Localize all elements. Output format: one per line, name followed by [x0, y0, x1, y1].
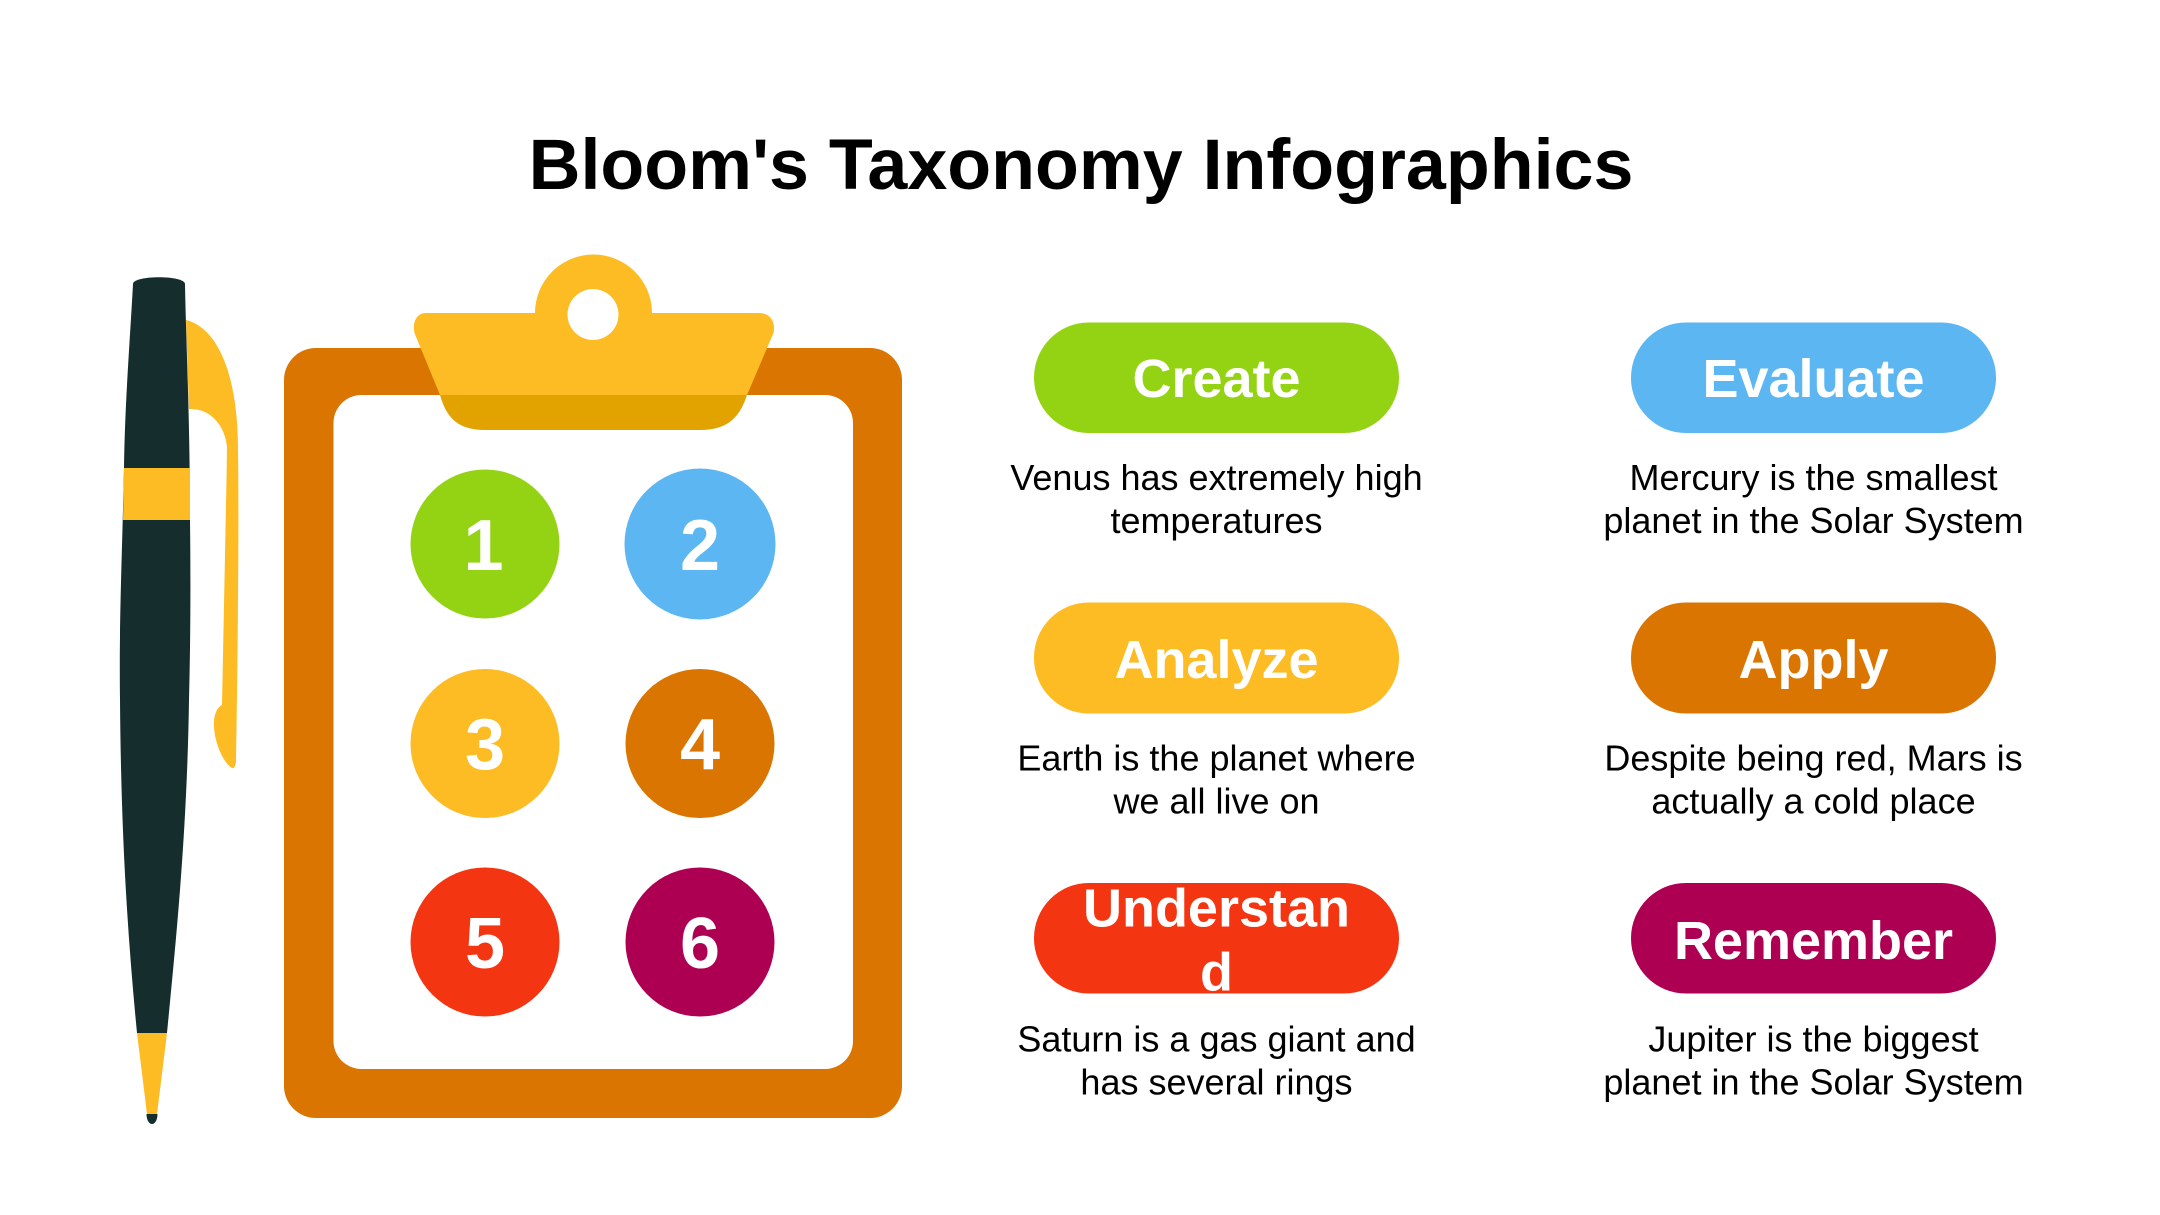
pen tip	[146, 1114, 158, 1124]
item: Understand: d	[1200, 942, 1233, 1002]
item: Remember	[1603, 883, 2024, 1102]
number 1	[410, 470, 560, 618]
item: Remember: Jupiter is the biggest	[1648, 1018, 1979, 1060]
item: Create: Create	[1132, 349, 1301, 409]
number 3	[410, 669, 560, 818]
number 4	[626, 669, 774, 818]
item: Create: Venus has extremely high	[1010, 457, 1423, 498]
pen band	[123, 468, 190, 520]
clipboard clip shadow	[440, 395, 747, 430]
item: Analyze: we all live on	[1112, 780, 1320, 822]
number 1: 1	[463, 506, 504, 586]
number 6: 6	[680, 904, 720, 984]
number 2	[624, 468, 776, 620]
number 6	[626, 868, 774, 1016]
clipboard board	[284, 348, 902, 1118]
item: Analyze: Earth is the planet where	[1017, 738, 1416, 778]
number 2: 2	[680, 506, 720, 586]
item: Remember: Remember	[1674, 911, 1953, 971]
item: Understand: has several rings	[1080, 1062, 1353, 1102]
item: Apply: Apply	[1738, 630, 1889, 690]
item: Analyze: Analyze	[1114, 630, 1319, 690]
clipboard	[284, 255, 902, 1118]
number 3: 3	[465, 705, 505, 785]
item: Evaluate: Evaluate	[1702, 349, 1925, 409]
item: Create: temperatures	[1110, 500, 1323, 541]
item: Evaluate	[1603, 322, 2024, 541]
item: Remember: planet in the Solar System	[1603, 1062, 2024, 1102]
item: Understand: Understan	[1083, 878, 1350, 938]
item: Create	[1010, 322, 1423, 541]
item: Analyze	[1017, 602, 1416, 822]
item: Understand: Saturn is a gas giant and	[1017, 1018, 1416, 1060]
pen nib	[137, 1033, 167, 1114]
title: Bloom's Taxonomy Infographics	[529, 125, 1633, 205]
icon: pen	[120, 277, 238, 1124]
pen body	[120, 277, 190, 1033]
item: Apply: Despite being red, Mars is	[1604, 738, 2023, 778]
number 5: 5	[465, 904, 505, 984]
item: Apply: actually a cold place	[1651, 780, 1976, 822]
clipboard clip	[414, 255, 774, 395]
number 4: 4	[680, 705, 720, 785]
number 5	[410, 868, 560, 1016]
pen clip	[186, 320, 238, 768]
item: Evaluate: planet in the Solar System	[1603, 500, 2024, 541]
item: Understand	[1017, 878, 1416, 1102]
clipboard paper	[334, 395, 853, 1069]
item: Apply	[1604, 602, 2023, 822]
item: Evaluate: Mercury is the smallest	[1629, 457, 1998, 498]
